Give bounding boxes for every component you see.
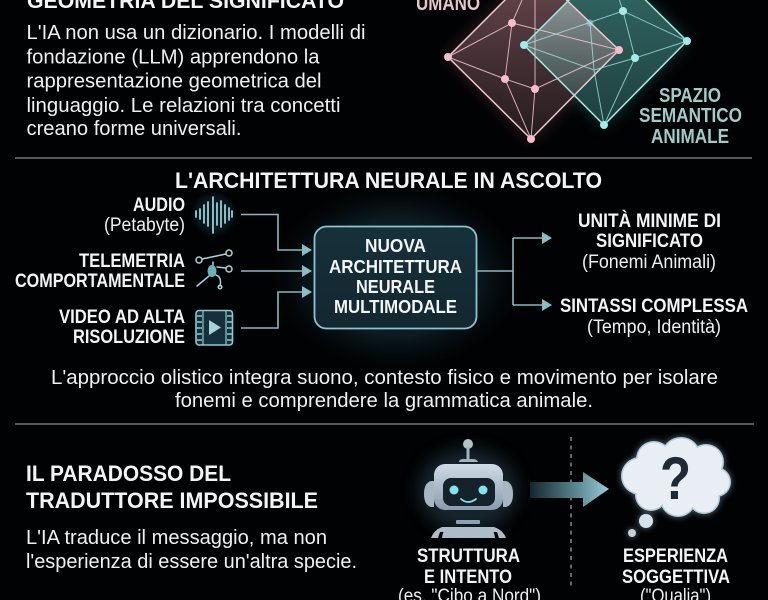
heading: il paradosso del traduttore impossibile: IL PARADOSSO DEL (26, 461, 231, 486)
input label: video ad alta risoluzione: RISOLUZIONE (73, 327, 185, 348)
output: unità minime di significato (578, 210, 721, 273)
icon: thought cloud with question mark (620, 436, 732, 538)
text block: geometry description: fondazione (LLM) apprendono la (26, 46, 320, 68)
label: struttura e intento (398, 546, 541, 600)
text block: paradox description: l'esperienza di essere un'altra specie. (26, 551, 357, 573)
icon: thought cloud with question mark: ? (660, 445, 691, 512)
heading: il paradosso del traduttore impossibile (26, 461, 318, 513)
output: unità minime di significato: (Fonemi Animali) (582, 252, 716, 273)
input label: audio: AUDIO (133, 195, 185, 216)
text block: paradox description: L'IA traduce il messaggio, ma non (26, 527, 327, 549)
label: spazio semantico animale: SPAZIO (659, 85, 721, 107)
panel: architettura neurale (15, 168, 748, 412)
text block: holistic approach caption (51, 366, 718, 412)
diagram: pink human space (444, 0, 623, 143)
icon: video film strip (196, 310, 232, 345)
heading: il paradosso del traduttore impossibile: TRADUTTORE IMPOSSIBILE (26, 488, 318, 513)
label: struttura e intento: E INTENTO (424, 567, 512, 588)
input label: video ad alta risoluzione (59, 307, 185, 348)
chart: overlapping semantic spaces (416, 0, 742, 148)
input label: telemetria comportamentale: COMPORTAMENTALE (15, 271, 185, 292)
icon: robot (418, 439, 518, 538)
text block: geometry description: rappresentazione geometrica del (26, 70, 322, 92)
input label: audio: (Petabyte) (104, 215, 185, 236)
icon: behavioural telemetry figure (196, 250, 232, 289)
panel: geometria del significato (26, 0, 742, 148)
output: sintassi complessa: SINTASSI COMPLESSA (560, 296, 748, 317)
text block: geometry description: L'IA non usa un dizionario. I modelli di (26, 22, 366, 44)
box: nuova architettura neurale multimodale: MULTIMODALE (334, 297, 457, 317)
text block: geometry description: linguaggio. Le relazioni tra concetti (26, 95, 340, 117)
input label: video ad alta risoluzione: VIDEO AD ALTA (59, 307, 185, 328)
label: spazio semantico animale (639, 85, 742, 148)
glow: processor halo (271, 185, 521, 369)
label: spazio semantico animale: ANIMALE (651, 126, 729, 148)
label: esperienza soggettiva: ESPERIENZA (623, 546, 728, 567)
output: sintassi complessa: (Tempo, Identità) (587, 317, 721, 338)
label: spazio semantico animale: SEMANTICO (639, 105, 742, 127)
box: nuova architettura neurale multimodale: NUOVA (365, 236, 426, 256)
text block: geometry description (26, 22, 366, 140)
divider: dashed vertical separator (570, 437, 572, 587)
input label: telemetria comportamentale: TELEMETRIA (79, 251, 185, 272)
panel: paradosso del traduttore (26, 436, 732, 600)
text block: holistic approach caption: fonemi e comprendere la grammatica animale. (175, 389, 593, 412)
text block: paradox description (26, 527, 357, 573)
diagram: teal animal space (520, 0, 691, 129)
label: esperienza soggettiva: SOGGETTIVA (622, 567, 730, 588)
arrow: translation direction (530, 472, 609, 507)
box: nuova architettura neurale multimodale: NEURALE (356, 277, 435, 297)
output: sintassi complessa (560, 296, 748, 338)
label: esperienza soggettiva (622, 546, 730, 600)
box: nuova architettura neurale multimodale (314, 226, 476, 328)
input label: telemetria comportamentale (15, 251, 185, 292)
icon: audio waveform (194, 194, 234, 234)
text block: geometry description: creano forme universali. (26, 118, 242, 140)
input label: audio (104, 195, 185, 236)
label: struttura e intento: STRUTTURA (417, 546, 520, 567)
arrows: inputs to processor (241, 214, 312, 328)
arrows: processor to outputs (477, 232, 552, 311)
heading: l'architettura neurale in ascolto: L'ARCHITETTURA NEURALE IN ASCOLTO (175, 168, 602, 193)
output: unità minime di significato: UNITÀ MINIME DI (578, 210, 721, 232)
output: unità minime di significato: SIGNIFICATO (596, 231, 703, 252)
text block: holistic approach caption: L'approccio olistico integra suono, contesto fisico e movimento per isolare (51, 366, 718, 389)
box: nuova architettura neurale multimodale: ARCHITETTURA (329, 257, 462, 277)
